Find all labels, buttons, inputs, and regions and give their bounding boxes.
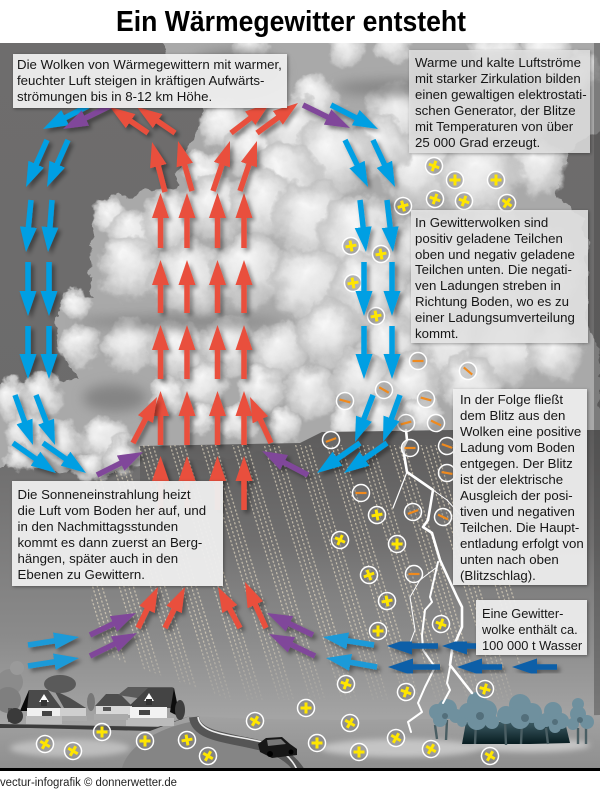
text box: charges: In Gewitterwolken sind [415,215,548,230]
bottom rule [0,768,600,771]
dark rain cloud base [140,430,600,640]
text box: sun heating: Die Sonneneinstrahlung heizt [18,487,191,502]
text box: top right: einen gewaltigen elektrostati- [415,87,587,102]
text box: water [476,600,587,655]
ground [0,715,600,768]
text box: charges: kommt. [415,326,458,341]
text box: sun heating: kommt es dann zuerst an Berg- [18,535,202,550]
car [258,737,297,758]
cloud shadow bands [75,50,455,412]
arrows: blue downdraft left [13,106,88,473]
text box: lightning: tiven und negativen [460,504,575,519]
text box: lightning: Ausgleich der posi- [460,488,573,503]
credit: vectur-infografik © donnerwetter.de [0,777,177,789]
arrows: purple transition [63,105,350,656]
text box: water: 100 000 t Wasser [482,638,583,653]
text box: charges [411,210,588,343]
text box: lightning: entladung erfolgt von [460,536,584,551]
text box: charges: oben und negativ geladene [415,247,575,262]
text box: sun heating: Ebenen zu Gewittern. [18,567,145,582]
text box: top left: strömungen bis in 8-12 km Höhe. [17,89,212,104]
forest [429,692,594,745]
road [194,717,302,775]
text box: lightning: In der Folge fließt [460,392,563,407]
arrows: red updraft, diagonal [110,103,298,628]
text box: sun heating: hängen, später auch in den [18,551,178,566]
right edge shade [594,43,600,768]
text box: top left: feuchter Luft steigen in kräftigen Aufwärts- [17,73,264,88]
house group left [20,690,87,724]
text box: charges: Richtung Boden, wo es zu [415,294,569,309]
house group right [94,687,180,726]
text box: sun heating: die Luft vom Boden her auf, und [18,503,206,518]
houses [0,661,185,726]
charge: plus particles [33,155,519,768]
text box: water: Eine Gewitter- [482,606,563,621]
charge: minus particles [320,352,480,582]
text box: top right: mit starker Zirkulation bilden [415,71,581,86]
arrows: blue downdraft right [317,105,400,473]
text box: lightning: Teilchen. Die Haupt- [460,520,579,535]
text box: lightning: (Blitzschlag). [460,568,536,583]
text box: lightning: Wolken eine positive [460,424,581,439]
text box: water: wolke enthält ca. [481,622,578,637]
text box: sun heating [12,481,223,586]
text box: lightning: dem Blitz aus den [460,408,565,423]
text box: top right: Warme und kalte Luftströme [415,55,581,70]
arrows: red updraft, vertical rows [160,193,244,510]
text box: lightning: unten nach oben [460,552,559,567]
text box: top right: 25 000 Grad erzeugt. [415,135,540,150]
text box: lightning [453,389,587,585]
text box: charges: einer Ladungsumverteilung [415,310,575,325]
title: Ein Wärmegewitter entsteht [116,6,466,38]
text box: lightning: ist der elektrische [460,472,563,487]
arrows: blue near ground [28,637,377,667]
text box: top right: mit Temperaturen von über [415,119,574,134]
text box: top left [13,54,287,108]
text box: charges: positiv geladene Teilchen [415,231,563,246]
text box: top right [409,50,590,153]
arrows: dark blue inflow [387,646,557,667]
cloud mass [0,25,600,485]
rain streaks [90,445,560,700]
trees by houses [0,661,185,724]
lightning [393,430,472,732]
text box: top right: schen Generator, der Blitze [415,103,576,118]
text box: lightning: Ladung vom Boden [460,440,575,455]
text box: charges: ven Ladungen streben in [415,278,561,293]
text box: top left: Die Wolken von Wärmegewittern mit warmer, [17,57,282,72]
text box: sun heating: in den Nachmittagsstunden [18,519,178,534]
text box: lightning: entgegen. Der Blitz [460,456,573,471]
text box: charges: Teilchen unten. Die negati- [415,262,572,277]
